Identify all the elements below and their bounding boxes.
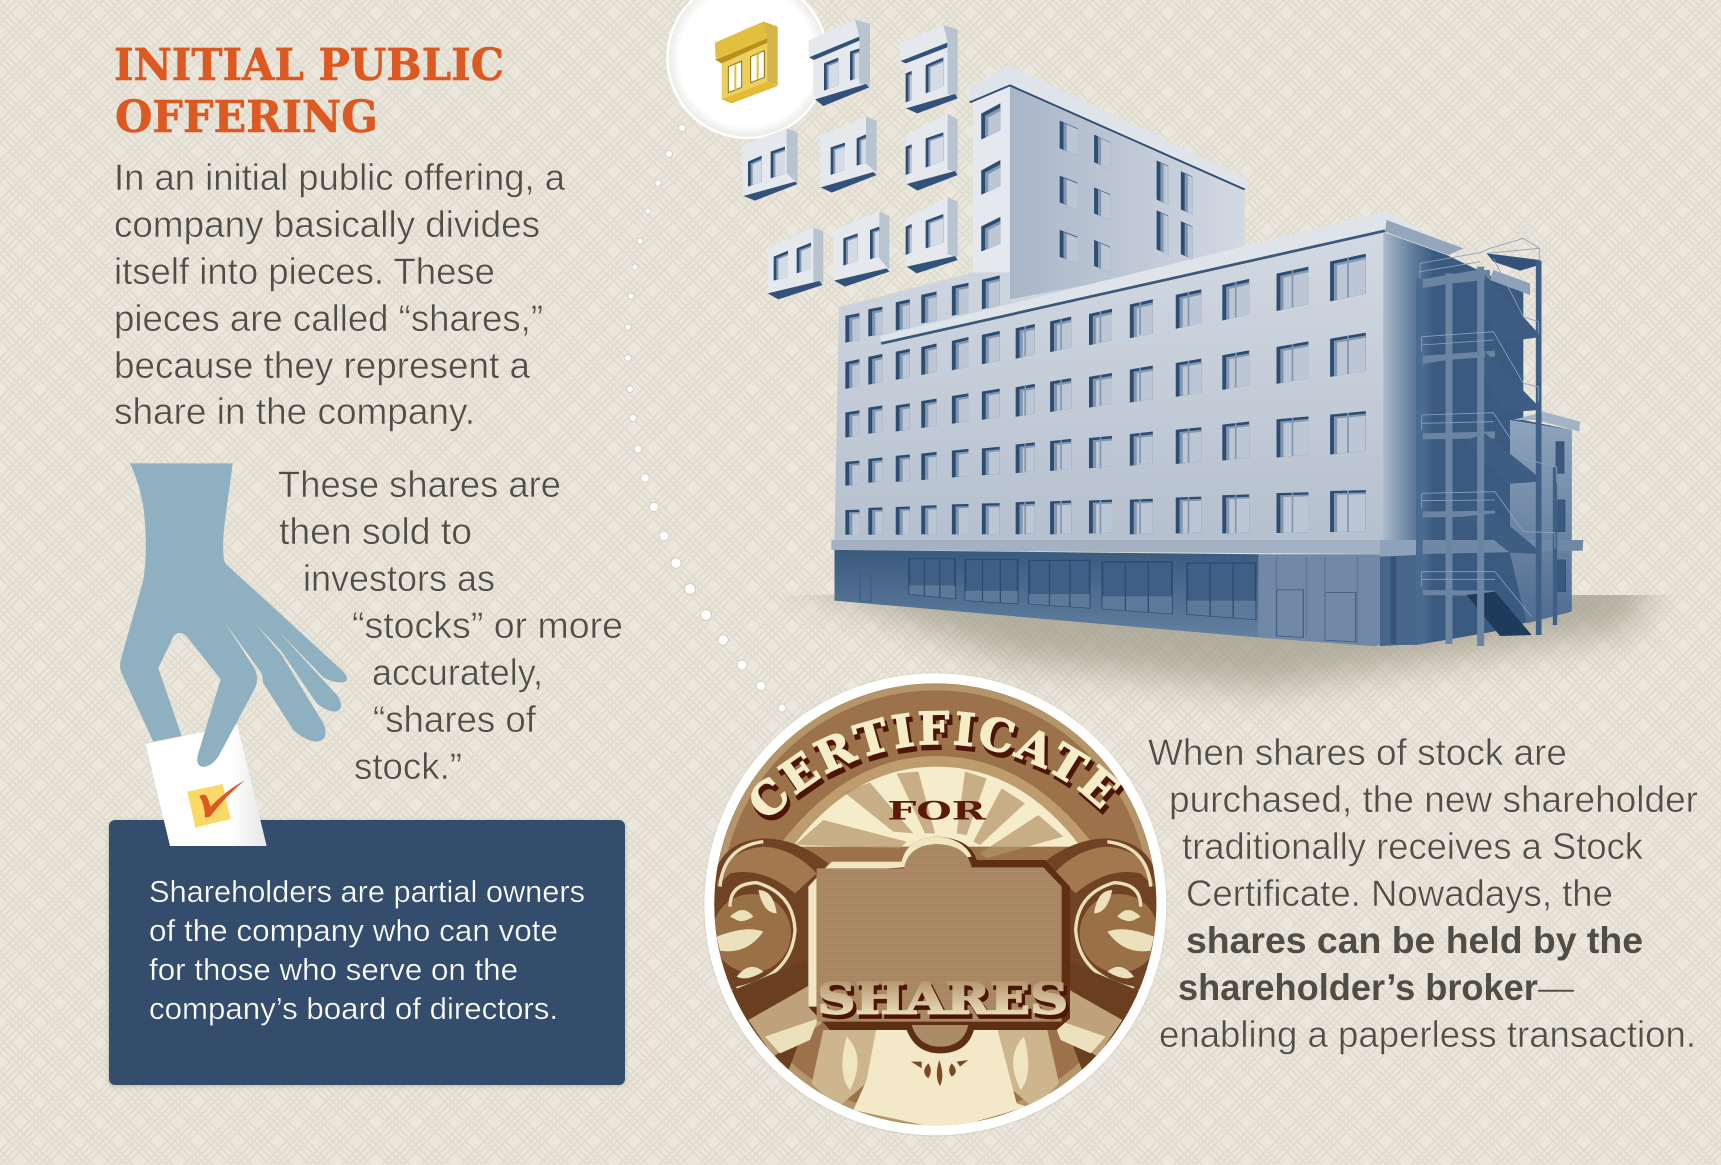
CERTIFICATE lettering: CERTIFICATE [753,714,1124,820]
text block: intro: In an initial public offering, a [114,157,565,198]
building side wall and fire escape [1380,220,1583,646]
SHARES lettering [820,980,1069,1020]
main roof cornice [879,211,1463,343]
text block: intro: because they represent a [114,345,530,386]
text block: shares sold to investors [278,464,623,787]
central plaque [808,837,1070,1053]
posts [1409,278,1429,643]
stairs [1463,275,1538,554]
text block: intro: pieces are called “shares,” [114,298,543,339]
icon: highlighted share circle [668,0,828,138]
title [114,40,504,143]
side wall [1380,232,1572,645]
floating share tiles [715,19,958,299]
small ornament [911,1060,968,1086]
SHARES lettering: SHARES [817,973,1068,1024]
text block: intro: company basically divides [114,204,540,245]
tile H [906,197,958,273]
text block: stock certificate: shares can be held by the [1186,920,1643,961]
arch with rays: FOR [887,795,987,825]
text block: shares sold to investors: investors as [303,558,495,599]
text block: stock certificate: When shares of stock are [1148,732,1567,773]
tile B [900,25,958,113]
tower [970,65,1247,312]
mirrored scrolls [992,838,1158,1108]
text block: shares sold to investors: “stocks” or more [352,605,623,646]
ground shadow [770,570,1660,690]
panel: shareholders callout: company’s board of directors. [149,991,558,1026]
tile windows [748,48,948,283]
text block: shares sold to investors: stock.” [354,746,462,787]
text block: intro [114,157,565,432]
text block: shares sold to investors: “shares of [373,699,537,740]
windows [845,103,1373,539]
top platform [1487,253,1539,271]
tile A [808,19,870,106]
dotted path [625,124,786,712]
text block: stock certificate [1148,732,1698,1055]
landings [1422,270,1495,596]
lower corner base [1380,554,1422,646]
building front and tower [831,65,1463,646]
panel: shareholders callout: Shareholders are partial owners [149,874,585,909]
text block: stock certificate: traditionally receives a Stock [1182,826,1643,867]
tile C [742,128,798,201]
scrolls [712,838,878,1108]
text block: intro: itself into pieces. These [114,251,495,292]
yellow tile [715,22,778,103]
panel: shareholders callout [109,820,625,1085]
tile E [906,114,958,191]
text block: shares sold to investors: These shares are [278,464,561,505]
text block: intro: share in the company. [114,391,475,432]
tile D [820,117,877,193]
text block: stock certificate: shareholder’s broker— [1178,967,1574,1008]
title: INITIAL PUBLIC [114,40,504,91]
tile F [767,227,823,299]
wing windows [1556,442,1566,592]
plinth [831,540,1417,554]
stock certificate seal [704,673,1167,1136]
text block: shares sold to investors: then sold to [279,511,472,552]
front wall [835,230,1386,540]
panel: shareholders callout: of the company who can vote [149,913,558,948]
lower cream area [853,1027,1027,1130]
text block: stock certificate: Certificate. Nowadays, the [1186,873,1613,914]
railings [1420,238,1557,617]
roof side [1385,220,1463,255]
SHARES lettering: SHARES [820,977,1071,1028]
side plinth [1380,540,1417,557]
tile G [833,212,889,287]
arch with rays [778,756,1095,858]
text block: shares sold to investors: accurately, [372,652,543,693]
panel: shareholders callout: for those who serve on the [149,952,518,987]
ground floor [835,550,1417,646]
CERTIFICATE lettering: CERTIFICATE [751,710,1121,816]
title: OFFERING [115,92,378,143]
text block: stock certificate: enabling a paperless transaction. [1159,1014,1696,1055]
icon: ballot paper with hand [120,463,347,846]
text block: stock certificate: purchased, the new shareholder [1169,779,1698,820]
